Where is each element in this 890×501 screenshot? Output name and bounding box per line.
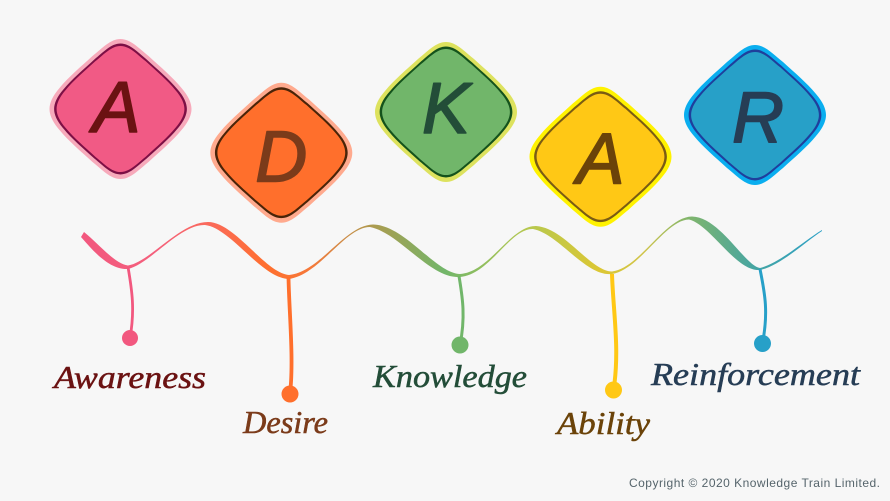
icon: A tile (Awareness): A	[88, 68, 141, 148]
copyright: Copyright © 2020 Knowledge Train Limited.	[629, 476, 880, 490]
icon: A tile (Awareness)	[50, 39, 192, 179]
stem and dot: Ability	[605, 274, 622, 398]
label: Desire: Desire	[242, 404, 328, 440]
label: Reinforcement: Reinforcement	[650, 356, 861, 392]
icon: A tile (Ability)	[530, 87, 672, 227]
stem and dot: Desire	[282, 277, 298, 402]
stem and dot: Knowledge	[452, 276, 468, 354]
stem and dot: Reinforcement	[754, 269, 771, 352]
icon: D tile (Desire): D	[255, 118, 307, 198]
label: Ability: Ability	[555, 405, 651, 441]
icon: R tile (Reinforcement): R	[732, 78, 784, 158]
icon: R tile (Reinforcement)	[684, 45, 826, 185]
stem and dot: Awareness	[122, 267, 138, 346]
wave line	[81, 216, 822, 279]
icon: A tile (Ability): A	[572, 120, 625, 200]
label: Awareness: Awareness	[52, 359, 206, 395]
icon: D tile (Desire)	[210, 83, 352, 223]
icon: K tile (Knowledge): K	[422, 69, 473, 149]
label: Knowledge: Knowledge	[372, 358, 527, 394]
icon: K tile (Knowledge)	[375, 42, 517, 182]
